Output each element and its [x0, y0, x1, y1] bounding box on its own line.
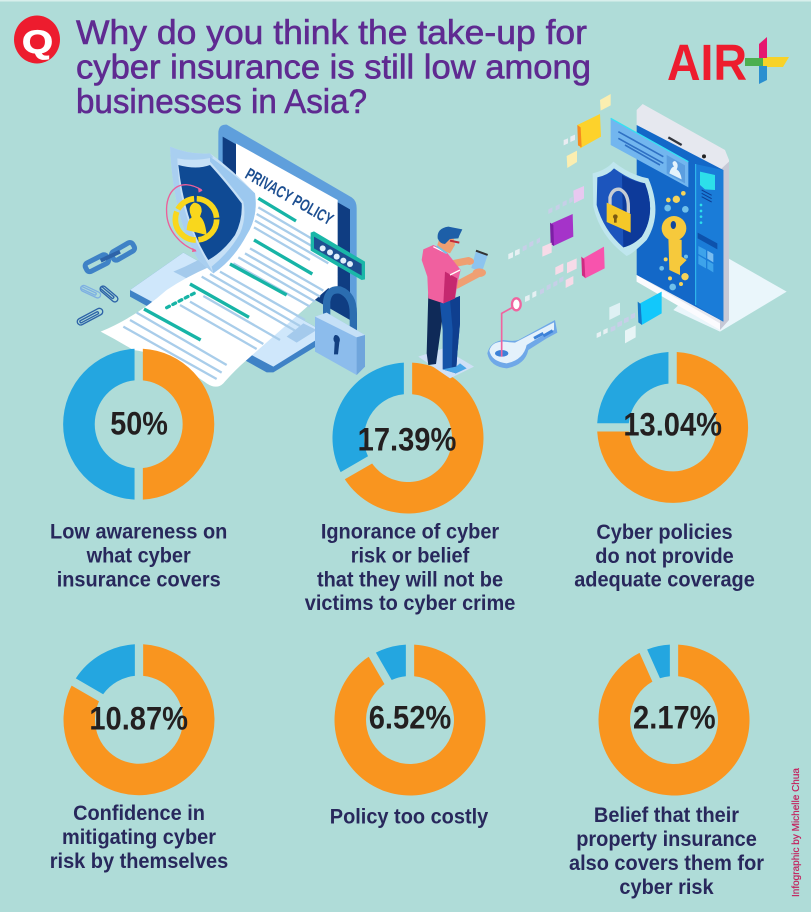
padlock: [315, 290, 365, 375]
caption: low awareness: insurance covers: [57, 568, 221, 592]
privacy policy heading: PRIVACY POLICY: [242, 164, 337, 229]
floating squares: [508, 94, 636, 343]
percent labels: 17.39%: [358, 422, 456, 458]
caption: ignorance: that they will not be: [317, 568, 503, 591]
hands: [465, 258, 486, 277]
profile card: [611, 118, 688, 187]
donut: 50%: [63, 349, 214, 500]
donut: 13.04%: [597, 352, 748, 503]
title: [76, 14, 591, 121]
caption: confidence: mitigating cyber: [62, 826, 216, 849]
percent labels: 2.17%: [633, 700, 716, 736]
caption: belief: also covers them for: [569, 852, 764, 875]
chain link icon: [84, 241, 136, 273]
shirt: [422, 245, 461, 303]
floor shadow: [673, 258, 787, 332]
credit: Infographic by Michelle Chua: [791, 768, 802, 897]
logo: AIR+: AIR: [667, 34, 747, 91]
illustration: privacy policy laptop: [76, 125, 365, 387]
caption: confidence: risk by themselves: [50, 850, 228, 873]
percent labels: 6.52%: [369, 700, 451, 736]
pink cube: [581, 247, 605, 278]
caption: belief: Belief that their: [594, 804, 739, 827]
caption: cyber policies: do not provide: [595, 545, 734, 568]
purple cube: [550, 214, 573, 246]
donut: 17.39%: [332, 363, 483, 513]
caption: ignorance: victims to cyber crime: [305, 592, 515, 615]
illustration: phone security: [487, 94, 787, 368]
illustration: person with phone: [418, 227, 488, 378]
shield with lock: [593, 162, 655, 256]
percent labels: 50%: [110, 406, 168, 442]
caption: cyber policies: adequate coverage: [574, 568, 755, 592]
caption: ignorance: Ignorance of cyber: [321, 520, 499, 543]
yellow cube: [577, 114, 601, 148]
caption: ignorance: risk or belief: [351, 544, 469, 567]
shield: [170, 147, 256, 273]
phone: [471, 251, 488, 272]
paper clip icons: [76, 284, 119, 326]
caption: low awareness: what cyber: [86, 544, 191, 567]
donut: 10.87%: [63, 644, 214, 795]
logo: Q: Q: [22, 24, 53, 60]
caption: belief: cyber risk: [619, 876, 714, 899]
caption: belief: property insurance: [576, 828, 757, 851]
password box: [311, 231, 365, 280]
title: cyber insurance is still low among: [76, 48, 591, 86]
paper sheet: [101, 220, 338, 387]
caption: policy too costly: Policy too costly: [330, 805, 489, 828]
laptop screen: [218, 125, 357, 323]
title: businesses in Asia?: [76, 83, 367, 121]
security ring icon: [167, 185, 217, 252]
key icon: [662, 216, 687, 275]
cyan cube: [638, 292, 662, 325]
caption: low awareness: Low awareness on: [50, 520, 227, 543]
arms: [455, 261, 480, 285]
trousers: [427, 293, 467, 373]
key pin: [502, 298, 521, 357]
head: [437, 227, 462, 253]
percent labels: [89, 406, 722, 737]
phone body: [637, 104, 729, 330]
caption: cyber policies: Cyber policies: [596, 521, 733, 544]
floor key: [487, 320, 557, 368]
logo: Q: [14, 16, 60, 64]
donut: 6.52%: [335, 645, 486, 795]
document stripes: [123, 207, 328, 379]
donut: 2.17%: [599, 645, 750, 795]
percent labels: 13.04%: [623, 407, 722, 443]
title: Why do you think the take-up for: [76, 14, 587, 52]
sparkle dots on phone: [664, 191, 689, 286]
percent labels: 10.87%: [89, 701, 188, 737]
laptop base: [130, 253, 327, 372]
platform: [418, 348, 474, 378]
teal accents: [144, 198, 312, 340]
caption: confidence: Confidence in: [73, 802, 205, 825]
